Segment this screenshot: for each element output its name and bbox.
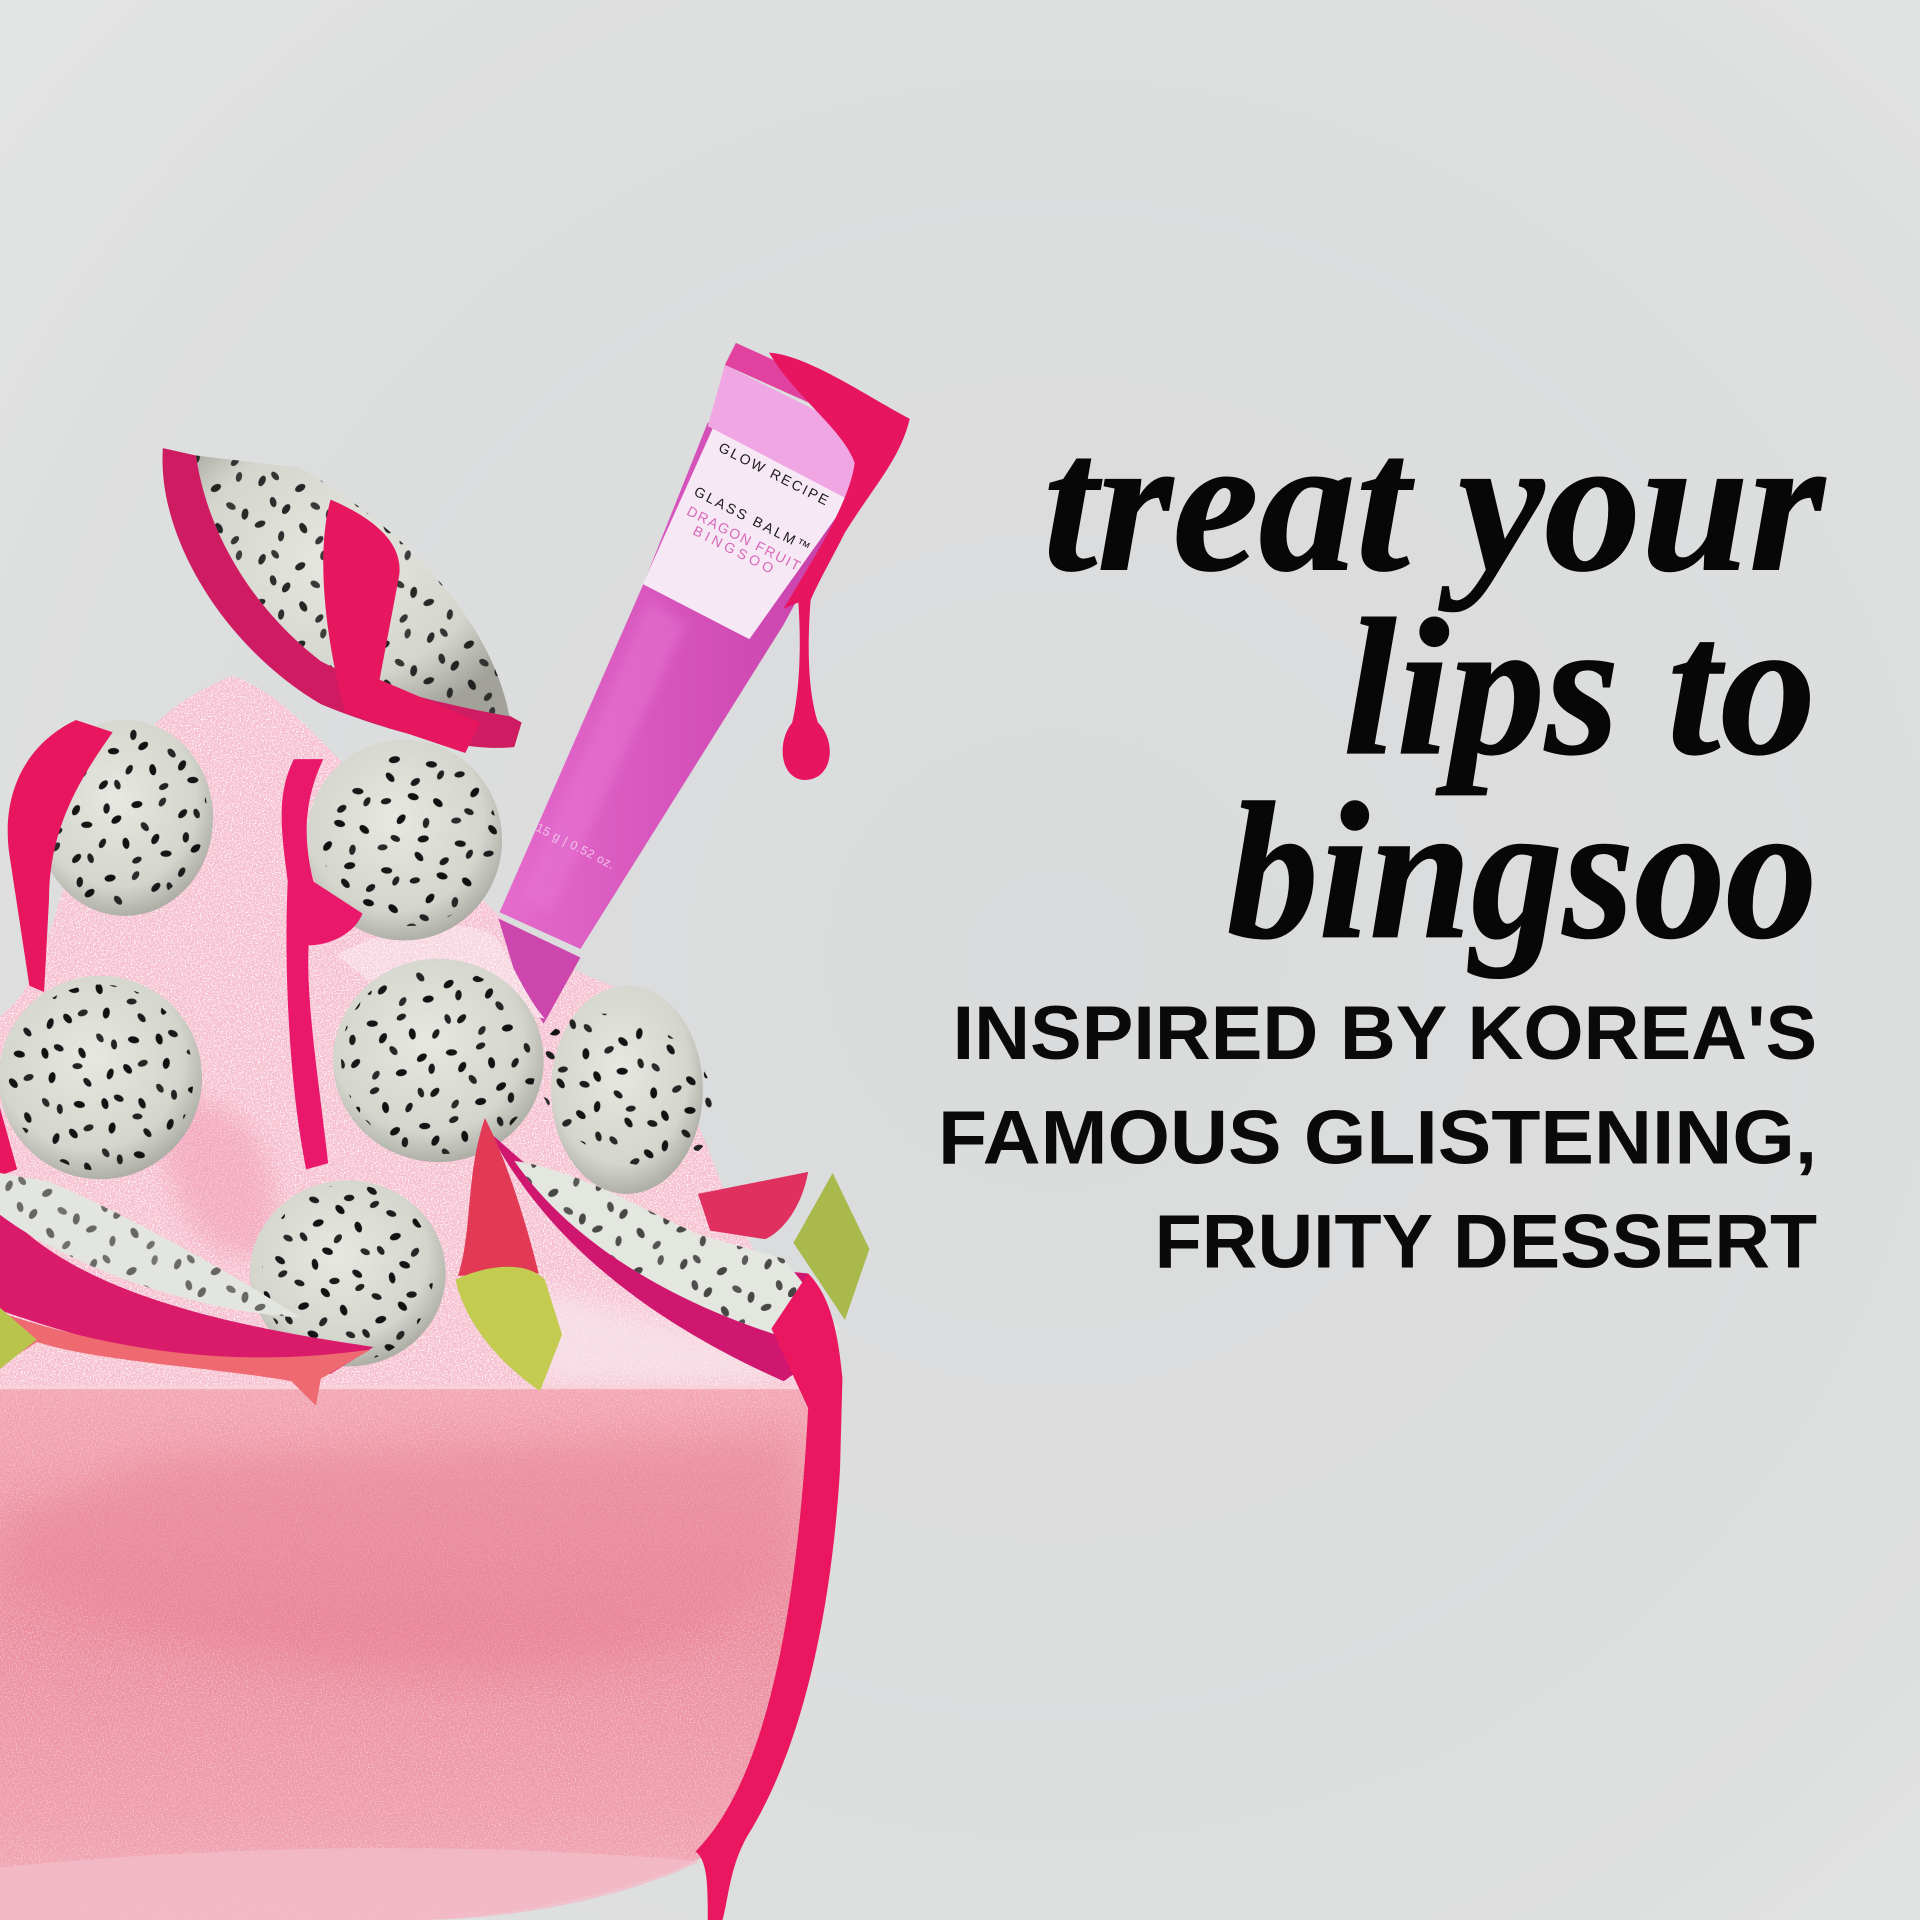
glass bowl xyxy=(0,1387,811,1920)
balm drip center xyxy=(282,759,362,1169)
dragon fruit pieces xyxy=(0,448,869,1406)
top fruit wedge xyxy=(162,448,522,753)
flavor line two: BINGSOO xyxy=(690,522,776,577)
ball four xyxy=(314,939,562,1181)
tube body xyxy=(500,422,857,949)
infographic canvas xyxy=(0,342,1827,1920)
balm drip left xyxy=(8,720,113,992)
ice deeper pink shading xyxy=(159,1098,276,1256)
headline line one: treat your xyxy=(1043,395,1826,612)
ball three xyxy=(0,946,232,1209)
tube crimped cap xyxy=(725,343,884,431)
small fruit wedge right xyxy=(698,1172,808,1239)
product name: GLASS BALM™ xyxy=(692,483,815,556)
tube highlight xyxy=(520,600,686,912)
tube label xyxy=(643,429,849,639)
bowl bottom reflection xyxy=(0,1848,700,1920)
green leaf right xyxy=(793,1173,869,1320)
brand name: GLOW RECIPE xyxy=(716,439,833,509)
darker sugar band xyxy=(0,1433,796,1678)
headline line two: lips to xyxy=(1343,579,1816,796)
left pink edge xyxy=(0,1108,17,1176)
ball two xyxy=(298,729,522,951)
bowl fill xyxy=(0,1387,811,1920)
ball one xyxy=(18,705,232,931)
tube base xyxy=(498,918,580,1024)
subheading xyxy=(938,991,1817,1284)
tube shoulder xyxy=(708,365,877,502)
ice frost highlights xyxy=(539,1286,784,1384)
flavor line one: DRAGON FRUIT xyxy=(684,503,803,574)
ice body xyxy=(0,676,820,1396)
ball six xyxy=(248,1171,448,1376)
shaved ice mound xyxy=(0,676,820,1396)
subheading line one: INSPIRED BY KOREA'S xyxy=(953,991,1817,1076)
left fruit wedge xyxy=(0,1173,373,1406)
headline line three: bingsoo xyxy=(1227,763,1817,980)
tube weight text: 15 g | 0.52 oz. xyxy=(534,820,617,872)
subheading line two: FAMOUS GLISTENING, xyxy=(938,1095,1817,1180)
product tube xyxy=(498,343,910,1024)
subheading line three: FRUITY DESSERT xyxy=(1155,1199,1817,1284)
balm drip on tube xyxy=(769,353,910,780)
balm drip over bowl xyxy=(696,1273,842,1920)
ice clump over tube base xyxy=(337,925,545,1019)
headline xyxy=(1043,395,1826,980)
right fruit wedge xyxy=(456,1118,839,1391)
bowl rim xyxy=(0,1386,808,1389)
ball five xyxy=(510,983,744,1197)
